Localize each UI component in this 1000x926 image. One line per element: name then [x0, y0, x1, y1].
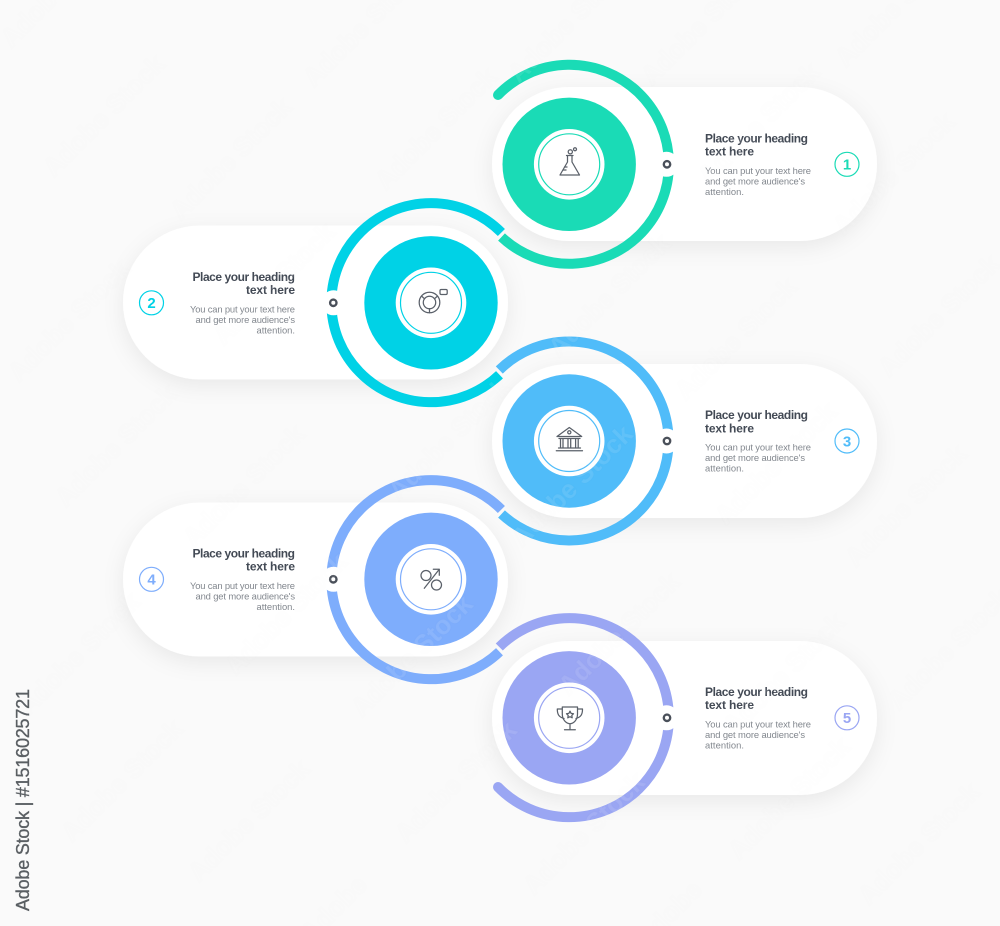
watermark pattern: Adobe Stock: [552, 566, 686, 700]
watermark pattern: Adobe Stock: [505, 418, 639, 552]
watermark pattern: Adobe Stock: [669, 271, 803, 405]
watermark pattern: Adobe Stock: [852, 776, 986, 910]
watermark pattern: Adobe Stock: [722, 731, 856, 865]
colored disc: [502, 98, 636, 231]
connector dot: [321, 567, 346, 592]
colored disc: [364, 236, 498, 370]
body text: You can put your text here: [190, 303, 295, 314]
colored disc: [502, 374, 636, 508]
heading: Place your heading: [192, 546, 295, 560]
number badge: [835, 706, 859, 730]
icon: ring chart: [419, 290, 447, 313]
step 5 content: [502, 651, 859, 784]
watermark pattern: Adobe Stock: [542, 228, 676, 362]
step 1 content: [502, 98, 859, 231]
watermark pattern: Adobe Stock: [37, 48, 171, 182]
panel: step 5 pill: [492, 641, 877, 795]
icon: bank building: [556, 428, 582, 451]
arc: step 5 violet ring: [493, 618, 669, 817]
body text: You can put your text here: [705, 718, 811, 729]
arc: step 1 green ring: [493, 65, 669, 264]
watermark pattern: Adobe Stock: [717, 606, 851, 740]
number badge: [140, 567, 164, 591]
body text: You can put your text here: [705, 165, 811, 176]
number badge: 2: [147, 295, 156, 312]
watermark pattern: Adobe Stock: [827, 106, 961, 240]
watermark pattern: Adobe Stock: [369, 61, 503, 195]
watermark pattern: Adobe Stock: [207, 216, 341, 350]
watermark pattern: Adobe Stock: [177, 418, 311, 552]
body text: and get more audience's: [705, 729, 805, 740]
connector dot: [654, 152, 679, 177]
heading: Place your heading: [705, 131, 808, 145]
connector dot: [654, 428, 679, 454]
watermark pattern: Adobe Stock: [709, 396, 843, 530]
body text: attention.: [705, 463, 744, 474]
icon: trophy: [557, 707, 582, 730]
body text: attention.: [256, 601, 295, 612]
arc: step 2 cyan ring: [331, 203, 501, 402]
panel: step 4 pill: [123, 502, 508, 656]
heading: Place your heading: [705, 685, 808, 699]
step 3 content: [502, 374, 859, 508]
panel: step 2 pill: [123, 226, 508, 380]
number badge: 3: [843, 433, 851, 450]
heading: Place your heading: [192, 270, 295, 284]
body text: attention.: [705, 186, 744, 197]
watermark pattern: Adobe Stock: [692, 56, 826, 190]
body text: You can put your text here: [705, 442, 811, 452]
side credit text: Adobe Stock | #1516025721: [13, 689, 33, 911]
step 4 content: [140, 513, 498, 646]
number badge: 5: [843, 710, 851, 727]
watermark pattern: Adobe Stock: [182, 753, 316, 887]
heading: text here: [246, 283, 295, 297]
number badge: [835, 152, 859, 176]
body text: and get more audience's: [196, 314, 295, 325]
watermark pattern: Adobe Stock: [389, 714, 523, 848]
connector dot: [321, 290, 346, 315]
watermark pattern: Adobe Stock: [839, 438, 973, 572]
connector dot: [654, 705, 679, 730]
body text: and get more audience's: [705, 452, 805, 463]
watermark pattern: Adobe Stock: [49, 378, 183, 512]
watermark pattern: Adobe Stock: [382, 371, 516, 505]
heading: text here: [705, 698, 754, 712]
colored disc: [502, 651, 636, 784]
body text: attention.: [256, 324, 295, 336]
watermark pattern: Adobe Stock: [517, 766, 651, 900]
body text: attention.: [705, 740, 744, 750]
heading: text here: [705, 421, 754, 435]
colored disc: [364, 513, 498, 646]
watermark pattern: Adobe Stock: [164, 91, 298, 225]
body text: and get more audience's: [705, 175, 805, 186]
heading: Place your heading: [705, 408, 808, 422]
body text: and get more audience's: [196, 590, 295, 601]
heading: text here: [246, 560, 295, 574]
watermark pattern: Adobe Stock: [2, 253, 136, 387]
number badge: 4: [147, 572, 156, 589]
body text: You can put your text here: [190, 580, 295, 591]
step 2 content: [140, 236, 498, 370]
icon: percent arrow: [421, 569, 442, 590]
arc: step 3 blue ring: [499, 341, 669, 540]
arc: step 4 periwinkle ring: [331, 480, 501, 679]
watermark pattern: Adobe Stock: [219, 546, 353, 680]
number badge: 1: [843, 157, 851, 174]
heading: text here: [705, 145, 754, 159]
watermark pattern: Adobe Stock: [12, 586, 146, 720]
icon: flask: [560, 148, 580, 175]
number badge: [140, 291, 164, 315]
watermark pattern: Adobe Stock: [345, 588, 479, 722]
watermark pattern: Adobe Stock: [55, 713, 189, 847]
panel: step 3 pill: [492, 364, 877, 518]
panel: step 1 pill: [492, 87, 877, 241]
number badge: [835, 429, 859, 453]
